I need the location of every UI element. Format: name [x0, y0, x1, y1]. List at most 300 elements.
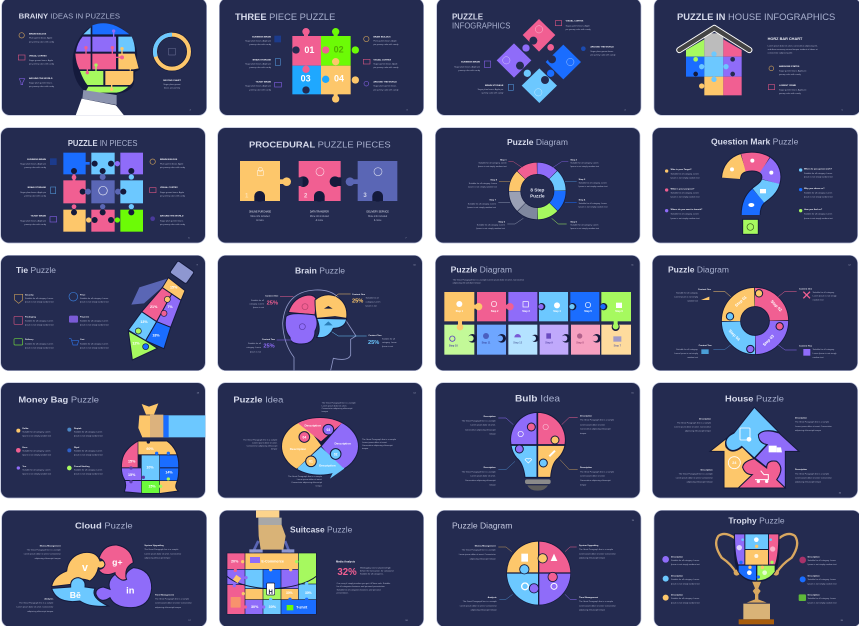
text block: brain buildus: BRAIN BUILDUS [373, 35, 391, 38]
heading: PROCEDURAL PUZZLE PIECES [249, 140, 391, 150]
description list right: Ipsum is not simply random text [808, 563, 837, 566]
text block: analysis [460, 596, 498, 612]
description list right: Suitable for all category. Lorem [808, 597, 836, 600]
callout: content two right: Suitable for all category. [813, 348, 835, 351]
text block bottom right: Consectetur adipiscing elitsuscipit [580, 479, 611, 482]
text block: visual cortex: Sugar gummi bears. Apple [373, 62, 398, 65]
question list left: Suitable for all category. Lorem [671, 213, 699, 216]
four piece puzzle [292, 28, 359, 103]
currency list: Riyal [74, 447, 80, 449]
caption: online purchase: ONLINE PURCHASE [249, 210, 272, 213]
callout: content one left: Suitable for all category. [676, 292, 699, 295]
puzzle strip: Step 12 [513, 342, 523, 345]
text block: around the world: pie yummy cake with candy [373, 88, 399, 91]
step labels left: Suitable for all category. Lorem [477, 224, 505, 227]
text block: brain storage: Sugar plum bears. Apple pie [245, 62, 272, 65]
feature list: Suitable for all category. Lorem [80, 297, 108, 300]
heading: Puzzle Diagram [668, 266, 729, 275]
text block: business brain: yummy cake with candy [249, 43, 272, 46]
text block bottom right: The Great Paragraph line is a sample [580, 470, 615, 473]
text block: awesome states: yummy cake with candy [779, 73, 802, 76]
text block: lowest crime: yummy cake with candy [779, 92, 802, 95]
text block: awesome states [769, 65, 807, 76]
description list right: Ipsum is not simply random text [808, 601, 837, 604]
panel: money bag puzzle [1, 383, 205, 498]
text block bottom left: adipiscing elitsuscipit tempor [687, 481, 713, 484]
caption: data transfer [310, 210, 330, 222]
feature list: Ipsum is not simply random text [25, 346, 54, 349]
heading: PUZZLE IN HOUSE INFOGRAPHICS [677, 12, 835, 22]
text block top left [674, 417, 712, 433]
heading: Trophy Puzzle [728, 516, 785, 526]
callout: content two left [674, 344, 731, 359]
text block: visual cortex: Sugar gummi bears. Apple [566, 24, 591, 27]
text block top: Consectetur adipiscing elitsuscipit [322, 407, 353, 410]
text block: bar chart [768, 37, 818, 54]
text block: visual cortex: pie yummy cake with candy [29, 63, 55, 66]
panel: money bag puzzle: 13 [197, 393, 200, 395]
text block: money management: The Great Paragraph line is a sample [27, 549, 62, 552]
text block top right: The Great Paragraph line is a sample [580, 419, 615, 422]
currency list: Suitable for all category. Lorem [22, 469, 51, 472]
text block: system upgrading: System Upgrading [144, 544, 164, 547]
callout: content two right: Lorem Ipsum is not simply [813, 352, 837, 355]
suitcase puzzle: E-Commerce [261, 559, 284, 563]
text block: visual cortex [18, 55, 55, 66]
currency list: Rupiah [74, 428, 82, 430]
media analysis text [336, 559, 393, 594]
panel: question mark puzzle [652, 128, 858, 243]
text block: around the world: pie yummy cake with candy [590, 53, 616, 56]
callout: content two right: random text [813, 356, 824, 359]
text block: time management: Time Management [579, 596, 598, 599]
feature list: Ipsum is not simply random text [25, 323, 54, 326]
callout: content two left: Lorem Ipsum is not simply [674, 352, 699, 355]
text block: bar chart: sed diam nonummy eirmod tempor invidunt ut labore et [768, 48, 818, 51]
puzzle piece 2 [298, 161, 341, 202]
step labels left: Ipsum is not simply random text [467, 206, 496, 209]
text block: money management: Money Management [475, 545, 496, 548]
text block: visual cortex [363, 58, 399, 69]
heading: BRAINY IDEAS IN PUZZLES [19, 11, 120, 20]
text block: bar chart: HORZ BAR CHART [768, 37, 803, 41]
feature list: Security [25, 293, 34, 296]
caption: data transfer: DATA TRANSFER [310, 210, 329, 213]
panel: four step ring diagram [652, 255, 858, 371]
caption: delivery service: & more [374, 219, 382, 222]
step labels left: Step 6 [498, 220, 506, 223]
callout: content one left [249, 294, 293, 309]
text block bottom: The Great Paragraph line is a sample [288, 475, 323, 478]
feature list: Packaging [25, 316, 37, 318]
callout: content two left [246, 338, 292, 353]
text block bottom: Consectetur adipiscing elitsuscipit [291, 481, 322, 484]
feature list: Suitable for all category. Lorem [25, 342, 53, 345]
text block: brain storage [20, 186, 56, 198]
callout: content one right: Suitable for all [366, 297, 379, 300]
text block top left [462, 415, 497, 436]
text block: business brain: yummy cake with candy [458, 69, 481, 72]
text block: brain storage: yummy cake with candy [482, 92, 504, 95]
caption: online purchase [249, 210, 272, 222]
question list right [799, 168, 833, 220]
panel: puzzle in pieces: 6 [188, 237, 190, 239]
text block: business brain: Sugar plum bears. Apple pie [454, 65, 481, 68]
caption: data transfer: & more [316, 219, 324, 222]
text block top right: Lorem ipsum dolor sit amet. Consectetur [795, 425, 832, 428]
callout: content two right: Ipsum is not [382, 345, 393, 348]
text block top left: Description [699, 417, 712, 420]
circle puzzle [506, 541, 571, 605]
feature list: Cart [80, 338, 85, 341]
text block: visual cortex [555, 20, 592, 31]
text block bottom right: The Great Paragraph line is a sample [795, 472, 830, 475]
callout: content one left: Content One [265, 294, 279, 297]
text block: brain buildus: Plum gummi bears. Apple [160, 162, 184, 165]
step labels right: Step 3 [579, 178, 586, 181]
text block: analysis: Analysis [488, 596, 497, 599]
caption: delivery service: DELIVERY SERVICE [367, 211, 389, 213]
heading: Puzzle Diagram [451, 266, 512, 275]
nine piece puzzle [63, 153, 143, 232]
callout: content one left: 25% [267, 300, 278, 306]
question list right: Suitable for all category. Lorem [804, 172, 832, 175]
text block: business brain [20, 158, 57, 169]
text block bottom left: tempor [489, 484, 496, 487]
suitcase puzzle: 20% [231, 559, 239, 563]
text block: time management: adipiscing elitsuscipit tempor [579, 609, 605, 612]
text block: awesome states: Sugar gummi bears. Apple pie [779, 69, 807, 72]
speech bubble puzzle: Description [290, 447, 306, 451]
description list left: Suitable for all category. Lorem [671, 559, 699, 562]
text block right: tempor [362, 447, 369, 450]
text block: brain buildus: Plum gummi bears. Apple [373, 39, 398, 42]
text block top: The Great Paragraph line is a sample [322, 401, 357, 404]
media analysis text: 32% [337, 567, 357, 578]
four piece puzzle: 04 [334, 74, 344, 84]
text block: time management: Time Management [155, 594, 174, 597]
panel: procedural puzzle pieces: 7 [405, 237, 407, 239]
text block: around the world: pie yummy cake with candy [29, 85, 55, 88]
puzzle strip: Step 7 [614, 345, 622, 348]
panel: puzzle in house [654, 0, 859, 115]
text block: time management: adipiscing elitsuscipit tempor [155, 606, 181, 609]
panel: bulb idea [435, 383, 640, 498]
money bag pieces: 10% [146, 465, 154, 469]
chart caption: Sugar plum gummi [163, 83, 181, 86]
heading: Question Mark Puzzle [711, 137, 799, 146]
ring labels: Step 04 [728, 328, 742, 342]
cloud puzzle pieces [52, 545, 152, 608]
puzzle strip: Step 1 [456, 310, 464, 313]
text block: money management: Money Management [40, 545, 61, 548]
text block bottom left: Lorem ipsum dolor sit amet. Consectetur [676, 476, 713, 479]
feature list: Ipsum is not simply random text [80, 301, 109, 304]
text block left: Lorem ipsum dolor sit amet. [252, 442, 278, 445]
question list left: Ipsum is not simply random text [671, 176, 700, 179]
panel: brainy ideas: 2 [190, 110, 192, 112]
currency list: Suitable for all category. Lorem [74, 450, 102, 453]
ring centre label: Puzzle [530, 194, 545, 199]
text block: around the world [150, 215, 186, 226]
ring puzzle [726, 290, 783, 353]
puzzle strip: Step 10 [449, 345, 458, 348]
text block right: The Great Paragraph line is a sample [362, 438, 397, 441]
heading: Tie Puzzle [16, 265, 56, 275]
step labels right: Ipsum is not simply random text [579, 185, 608, 188]
step labels right: Ipsum is not simply random text [579, 205, 608, 208]
panel: cloud puzzle [2, 510, 207, 626]
text block: brain storage: BRAIN STORAGE [253, 58, 272, 61]
chart caption: bears. pie yummy [164, 87, 181, 90]
head puzzle [73, 23, 140, 106]
text block: visual cortex [150, 186, 186, 198]
puzzle strip: Step 11 [482, 342, 491, 345]
puzzle strip: Step 6 [615, 310, 623, 313]
text block top [322, 401, 357, 413]
step labels right: Ipsum is not simply random text [570, 165, 600, 168]
text block bottom right [580, 466, 615, 487]
panel: 8 step puzzle diagram [435, 128, 640, 243]
text block top left: adipiscing elitsuscipit tempor [685, 430, 711, 433]
panel: bulb idea: 15 [631, 393, 634, 395]
currency list [16, 428, 103, 475]
tie puzzle shape: 18% [152, 333, 160, 337]
text block bottom left: Consectetur adipiscing elitsuscipit [465, 479, 496, 482]
text block: business brain: Sugar plum bears. Apple pie [245, 39, 272, 42]
currency list: Suitable for all category. Lorem [22, 450, 51, 453]
text block: around the world [581, 46, 616, 56]
description list left: Ipsum is not simply random text [671, 563, 700, 566]
text block top right [795, 417, 832, 432]
text block: business brain: BUSINESS BRAIN [27, 158, 46, 161]
question list left: Who is your Target? [671, 168, 692, 171]
text block bottom left: Lorem ipsum dolor sit amet. [470, 475, 496, 478]
callout: content two left: 25% [263, 344, 275, 350]
text block: analysis: adipiscing elitsuscipit tempor [471, 609, 497, 612]
text block: visual cortex: pie yummy cake with candy [373, 66, 399, 69]
media analysis text: Media Analysis [336, 559, 356, 563]
speech bubble puzzle: Description [334, 441, 351, 445]
text block top left: Consectetur adipiscing elitsuscipit [465, 428, 496, 431]
callout: content one left: Content One [698, 288, 712, 291]
callout: content one left [674, 288, 731, 303]
puzzle piece 2: 2 [304, 194, 308, 200]
callout: content one left: Suitable for all [251, 299, 265, 302]
suitcase puzzle: 30% [269, 605, 277, 609]
text block: around the world: AROUND THE WORLD [160, 215, 184, 218]
ring labels: Step 01 [734, 294, 748, 308]
caption: online purchase: More info included [250, 215, 270, 218]
text block: business brain [245, 35, 281, 46]
panel: suitcase puzzle: 18 [405, 620, 408, 622]
question list left [665, 168, 703, 220]
question mark dot [743, 219, 758, 234]
panel: circular puzzle diagram [437, 510, 641, 626]
ring labels [728, 294, 784, 347]
text block top right [580, 414, 615, 435]
description list left: Ipsum is not simply random text [671, 582, 700, 585]
text block: brain buildus [364, 35, 399, 46]
question list right: How you find us? [804, 209, 823, 211]
text block: money management: The Great Paragraph line is a sample [462, 549, 497, 552]
text block: brain storage: BRAIN STORAGE [485, 84, 504, 87]
text block: analysis: The Great Paragraph line is a sample [463, 600, 498, 603]
currency list: Dollar [22, 428, 29, 430]
text block: system upgrading: adipiscing elitsuscipit tempor [144, 556, 171, 559]
panel: house puzzle: 16 [839, 493, 842, 495]
callout: content two left: Suitable for all category. [676, 348, 699, 351]
callout: content two left: Content Two [699, 344, 712, 347]
panel: tie puzzle [1, 255, 205, 371]
text block top left: Description [484, 415, 496, 418]
panel: puzzle in pieces [1, 128, 205, 243]
text block: around the world: Sugar plum gummi bears. [160, 219, 184, 222]
callout: content one right: Ipsum is not [366, 304, 377, 307]
callout: content one left: Lorem Ipsum is not simply [674, 296, 699, 299]
text block left: tempor [271, 448, 278, 451]
money bag pieces: 60% [146, 447, 154, 451]
heading: Puzzle Diagram [507, 138, 568, 147]
tie puzzle shape: 13% [140, 320, 148, 324]
text block top: tempor [322, 410, 328, 413]
ring centre label: 8 Step [530, 187, 544, 192]
feature list: Suitable for all category. Lorem [25, 319, 53, 322]
text block: business brain: BUSINESS BRAIN [252, 35, 271, 38]
text block: system upgrading: Lorem ipsum dolor sit amet. Consectetur [579, 552, 616, 555]
step labels left: Ipsum is not simply random text [476, 227, 505, 230]
bulb puzzle [511, 412, 565, 477]
text block top right: tempor [580, 432, 587, 435]
text block: brain buildus: pie yummy cake with candy [160, 166, 186, 169]
text block: ticket brain: yummy cake with candy [249, 88, 272, 91]
text block: business brain [454, 61, 491, 72]
question list right: Ipsum is not simply random text [804, 176, 833, 179]
text block: analysis: adipiscing elitsuscipit tempor [27, 610, 54, 613]
heading: Puzzle Diagram [452, 521, 513, 530]
text block: business brain: BUSINESS BRAIN [461, 61, 480, 64]
tie puzzle shape [128, 261, 194, 360]
text block bottom [288, 475, 323, 487]
leader lines [498, 162, 577, 224]
description list left: Description [671, 574, 684, 577]
caption: delivery service [367, 211, 389, 222]
step labels right: Step 2 [570, 158, 578, 161]
callout: content two left: Suitable for all [248, 342, 262, 345]
heading: Cloud Puzzle [75, 520, 133, 530]
step labels left: Suitable for all category. Lorem [478, 162, 507, 165]
panel: tie puzzle: 9 [197, 265, 199, 267]
description list right: Ipsum is not simply random text [808, 582, 837, 585]
currency list: Euro [22, 447, 28, 449]
panel: puzzle infographics: 4 [624, 110, 626, 112]
callout: content one right: Content One [799, 287, 813, 290]
description list right: Suitable for all category. Lorem [808, 578, 836, 581]
suitcase puzzle: H [268, 590, 273, 596]
text block: ticket brain [245, 81, 281, 91]
text block: lowest crime: LOWEST CRIME [779, 85, 797, 87]
chart caption: SECOND CHART [163, 79, 181, 82]
text block: money management: Lorem ipsum dolor sit amet. Consectetur [24, 553, 61, 556]
text block: brain builds: pie yummy cake with candy [29, 40, 55, 43]
text block: time management [579, 596, 616, 612]
currency list: Ipsum is not simply random text [74, 453, 103, 456]
money bag pieces: 15% [148, 485, 156, 489]
media analysis text: Our every if simply involves you get it iPhone sale. Suitable [337, 582, 391, 585]
media analysis text: Suitable for all categories. [360, 572, 384, 575]
feature list: Ipsum is not simply random text [80, 346, 109, 349]
step labels right: Step 5 [570, 220, 578, 223]
suitcase puzzle: 30% [251, 605, 259, 609]
house puzzle pieces: 24 [732, 461, 737, 465]
text block: money management: adipiscing elitsuscipit tempor [470, 557, 496, 560]
text block: system upgrading: Lorem ipsum dolor sit amet. Consectetur [144, 552, 182, 555]
text block bottom left: Description [701, 468, 713, 471]
caption: delivery service: More info included [368, 215, 388, 218]
callout: content two right: Content Two [799, 345, 813, 348]
currency list: Ipsum is not simply random text [22, 472, 52, 475]
text block bottom left: Description [484, 466, 496, 469]
hand holding bag [138, 403, 205, 437]
paragraph: adipiscing elit sed diam tempor [453, 282, 481, 285]
text block: system upgrading: System Upgrading [579, 544, 599, 547]
panel: circular puzzle diagram: 19 [632, 520, 635, 522]
money bag pieces: 14% [165, 471, 173, 475]
paragraph: The Great Paragraph line is a sample Lorem ipsum dolor sit amet, Consectetur [453, 279, 524, 282]
text block: brain buildus: BRAIN BUILDUS [160, 158, 178, 161]
text block bottom right: Lorem ipsum dolor sit amet. [580, 475, 606, 478]
question list left: Suitable for all category. Lorem [671, 172, 699, 175]
speech bubble puzzle: Description [319, 463, 336, 467]
bulb base [525, 479, 551, 491]
text block left [243, 439, 278, 451]
step labels left: Ipsum is not simply random text [478, 165, 507, 168]
text block top left: Lorem ipsum dolor sit amet. [470, 424, 496, 427]
heading: Puzzle Idea [233, 394, 284, 404]
panel: three piece puzzle [219, 0, 424, 115]
callout: content one left: category. Lorem [249, 303, 264, 306]
description list left: Suitable for all category. Lorem [671, 578, 699, 581]
description list right: Description [808, 556, 820, 559]
description list left: Ipsum is not simply random text [671, 601, 700, 604]
callout: content one right: Suitable for all category. [813, 291, 835, 294]
puzzle strip [444, 292, 631, 355]
panel: four step ring diagram: 12 [848, 265, 851, 267]
callout: content two right: Content Two [368, 334, 382, 337]
puzzle strip: Step 9 [545, 342, 553, 345]
text block: money management [459, 545, 497, 560]
currency list: Ipsum is not simply random text [22, 453, 52, 456]
step labels right: Step 4 [579, 199, 586, 202]
text block: around the world [364, 81, 399, 91]
currency list: Ipsum is not simply random text [74, 434, 103, 437]
panel: puzzle in house: 5 [842, 110, 844, 112]
text block bottom right: Description [580, 466, 593, 469]
text block: system upgrading [144, 544, 182, 559]
heading: Bulb Idea [515, 393, 561, 403]
callout: content one right: Lorem Ipsum is not simply [813, 295, 837, 298]
text block: around the world: AROUND THE WORLD [590, 46, 614, 49]
panel: cloud puzzle: 17 [188, 620, 191, 622]
money bag pieces [120, 440, 180, 494]
callout: content one right: 25% [352, 299, 363, 305]
text block: around the world: pie yummy cake with candy [160, 223, 186, 226]
description list left: Description [671, 555, 684, 558]
text block: system upgrading: The Great Paragraph line is a sample [579, 548, 614, 551]
text block: brain storage: yummy cake with candy [249, 66, 272, 69]
text block: brain storage [478, 84, 513, 95]
text block top right: The Great Paragraph line is a sample [795, 421, 830, 424]
